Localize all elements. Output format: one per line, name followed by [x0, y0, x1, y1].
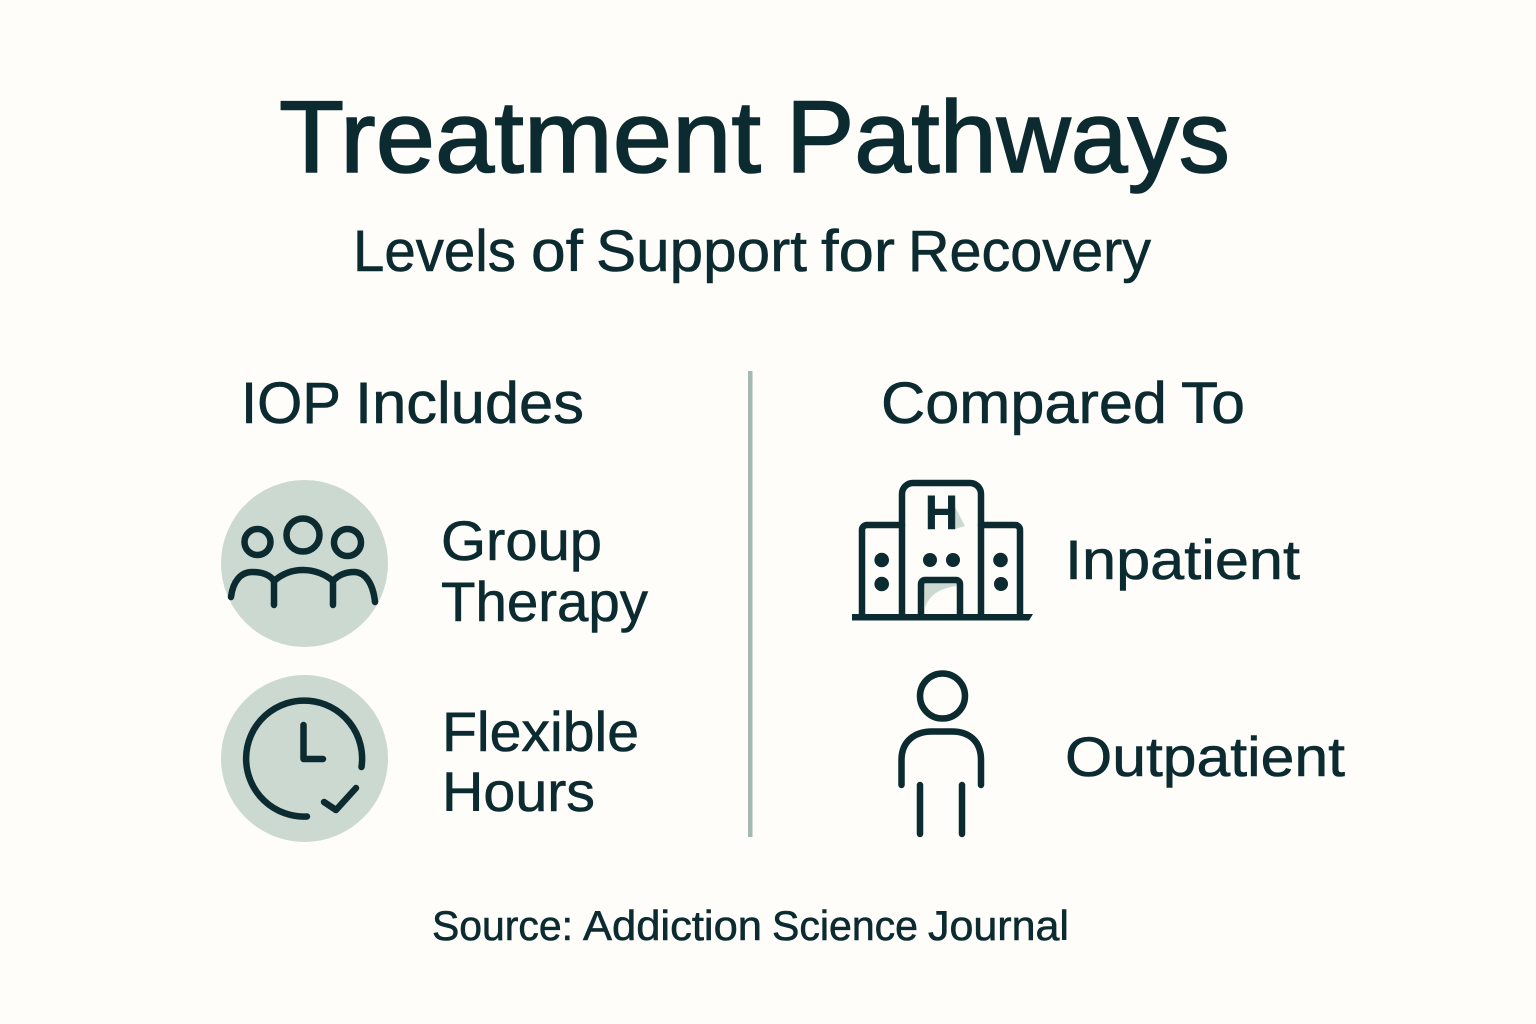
source note: Source:	[432, 902, 573, 949]
subtitle: Support	[596, 219, 807, 284]
icon: standing person	[902, 674, 981, 834]
subtitle	[353, 219, 1151, 284]
heading: IOP Includes: IOP	[241, 371, 341, 436]
subtitle: for	[821, 219, 895, 284]
icon: hospital building	[852, 483, 1033, 620]
label: Outpatient: Outpatient	[1065, 725, 1345, 788]
heading: IOP Includes: Includes	[355, 371, 584, 436]
source note	[432, 902, 1069, 949]
heading: IOP Includes	[241, 371, 584, 436]
source note: Science	[772, 902, 918, 949]
title	[279, 80, 1230, 194]
icon: group of people	[221, 480, 388, 647]
label: Flexible Hours: Flexible	[442, 700, 639, 763]
source note: Journal	[928, 902, 1069, 949]
center divider	[748, 371, 752, 837]
title: Pathways	[786, 80, 1230, 194]
label: Flexible Hours	[442, 700, 639, 823]
icon: hospital building: H	[925, 487, 958, 540]
subtitle: of	[531, 219, 584, 284]
source note: Addiction	[583, 902, 762, 949]
label: Group Therapy: Group	[441, 509, 602, 572]
label: Flexible Hours: Hours	[442, 760, 595, 823]
panel: IOP includes	[221, 371, 648, 842]
panel: compared to	[852, 371, 1345, 834]
label: Group Therapy	[441, 509, 648, 633]
heading: Compared To: Compared	[881, 371, 1167, 436]
icon: clock with check mark	[221, 675, 388, 842]
label: Group Therapy: Therapy	[441, 570, 648, 633]
subtitle: Levels	[353, 219, 516, 284]
title: Treatment	[279, 80, 761, 194]
subtitle: Recovery	[908, 219, 1151, 284]
label: Inpatient: Inpatient	[1065, 528, 1300, 591]
heading: Compared To: To	[1181, 371, 1245, 436]
